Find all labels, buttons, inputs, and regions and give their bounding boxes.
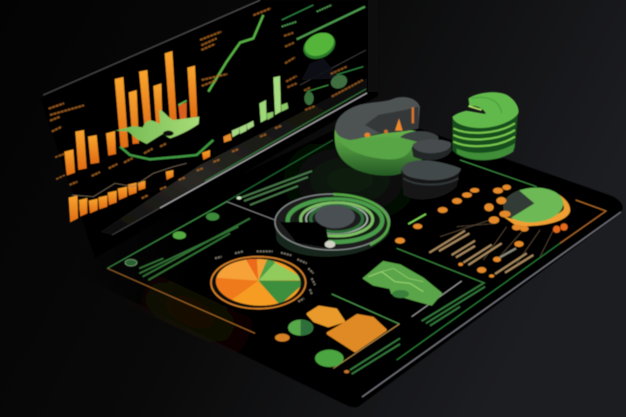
tan text strips (429, 231, 533, 274)
panel: hexagon area chart (363, 248, 485, 326)
monitor green bars (223, 76, 288, 143)
panel: circular dial (275, 194, 390, 257)
green stack (452, 92, 519, 160)
pie tick labels (215, 251, 315, 302)
lower orange bar row (68, 150, 210, 223)
monitor text strips (49, 8, 282, 198)
green ellipses (288, 320, 313, 336)
pie ring (211, 257, 306, 309)
tablet base (72, 112, 623, 407)
green text strips (139, 218, 250, 280)
tablet top green line and text strips (210, 140, 333, 211)
monitor (40, 0, 378, 258)
dial hub (315, 205, 355, 228)
3D grey and green stack (335, 97, 441, 176)
monitor right panel (282, 5, 366, 110)
orange nodes (395, 185, 568, 278)
small nodes (125, 259, 137, 266)
connector lines (440, 220, 553, 263)
small dark stacks (401, 139, 461, 200)
orange block large (328, 316, 385, 351)
orange block small (308, 307, 343, 326)
dial black wedge (280, 222, 328, 247)
panel: pie chart (107, 202, 315, 333)
right pie (503, 188, 570, 226)
panel: orange shapes chart (275, 294, 400, 374)
monitor bar chart (64, 51, 197, 176)
pie wedges (215, 258, 302, 307)
panel: right pie and nodes (395, 160, 606, 360)
monitor area blob and trend lines (115, 15, 263, 159)
